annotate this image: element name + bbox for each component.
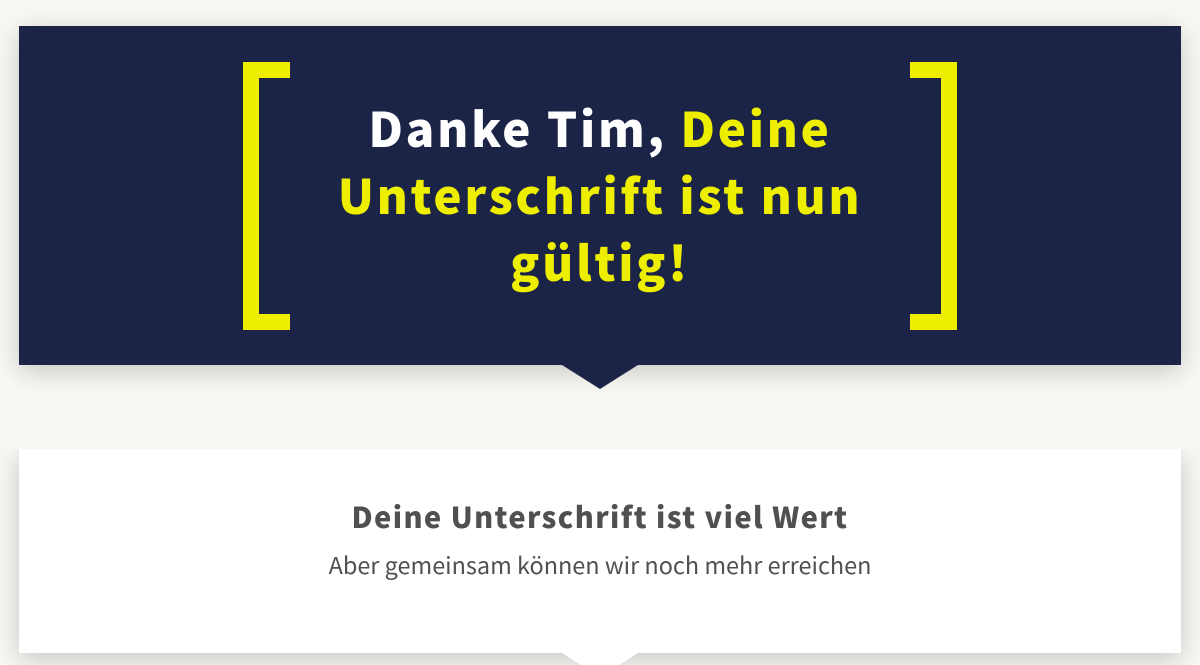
icon: left yellow bracket — [243, 62, 290, 330]
icon: right yellow bracket — [910, 62, 957, 330]
card subheading: Aber gemeinsam können wir noch mehr erreichen — [329, 547, 871, 581]
panel: white signature value card — [8, 449, 1192, 665]
title line 1: Danke Tim, Deine — [368, 92, 832, 161]
banner background — [19, 26, 1181, 365]
title line 2: Unterschrift ist nun — [338, 159, 862, 228]
card heading: Deine Unterschrift ist viel Wert — [352, 495, 848, 537]
card pointer arrow — [562, 653, 638, 665]
card background — [19, 449, 1181, 653]
panel: navy thank-you banner — [8, 20, 1192, 389]
banner pointer arrow — [562, 365, 638, 389]
title line 3: gültig! — [510, 226, 690, 295]
